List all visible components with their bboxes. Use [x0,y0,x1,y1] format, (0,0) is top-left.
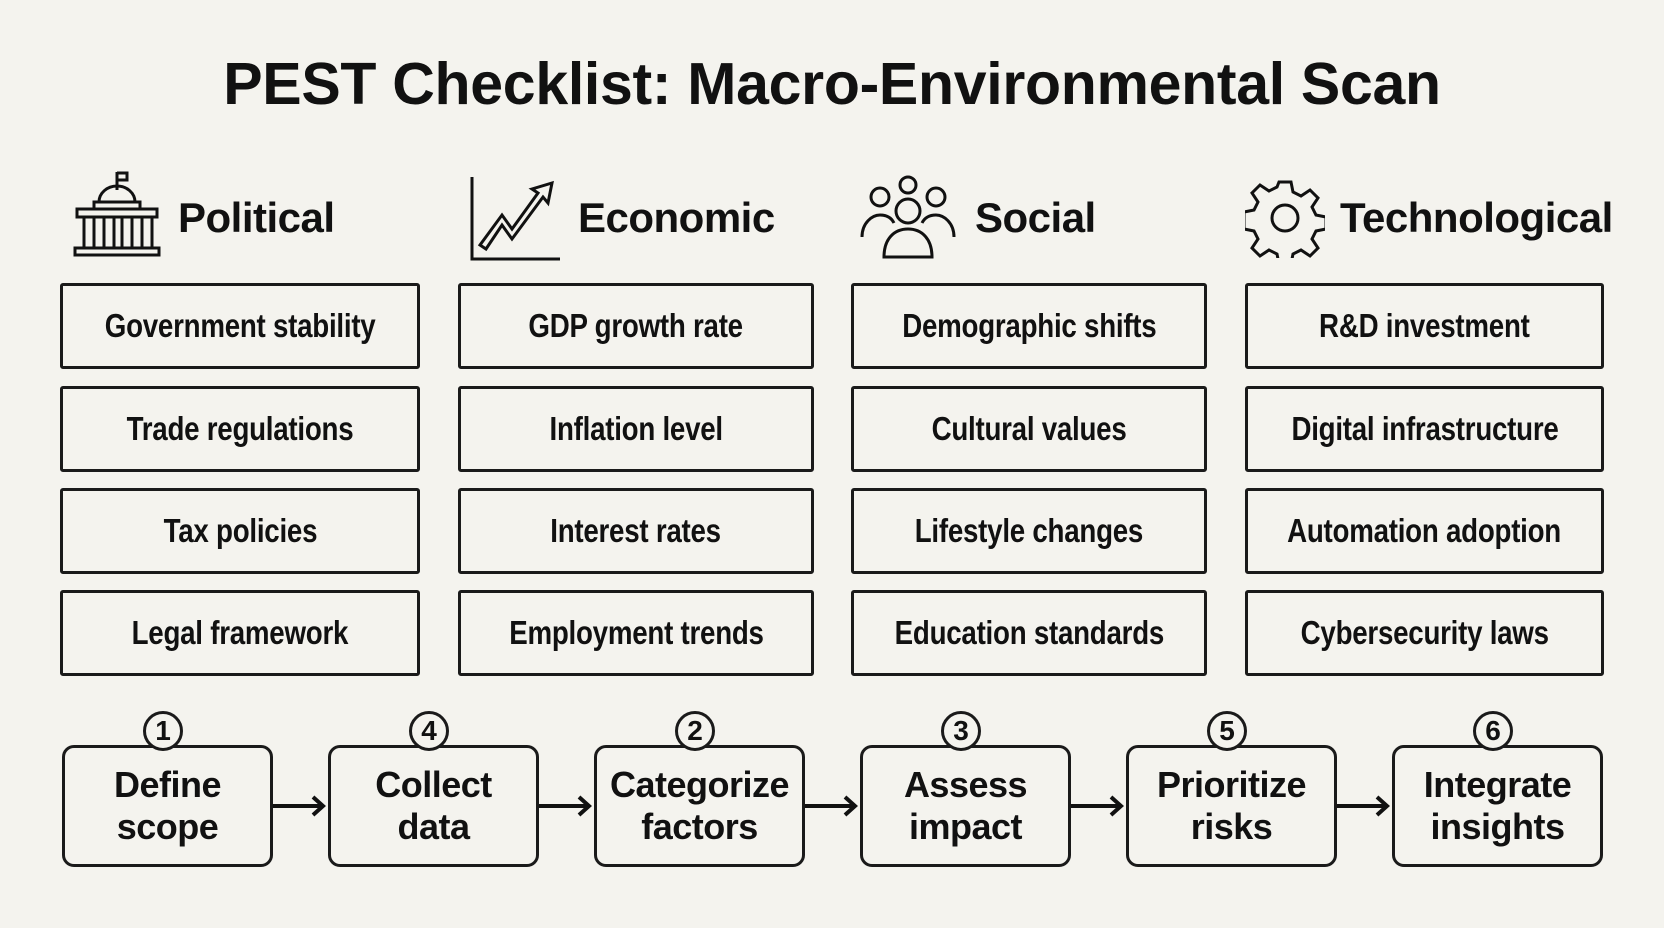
item [458,283,814,369]
title: PEST Checklist: Macro-Environmental Scan [223,51,1441,117]
column: political items [60,283,420,676]
step 5 box [1126,745,1337,867]
arrow [1071,796,1124,816]
step 1 box: scope [117,806,218,847]
item [1245,590,1604,676]
step badge 6: 6 [1485,715,1501,746]
step 1 box [62,745,273,867]
column: technological items [1245,283,1604,676]
step badge 5 [1207,711,1247,751]
item: Digital infrastructure [1291,410,1558,447]
step badge 6 [1473,711,1513,751]
heading: Economic: Economic [578,194,775,241]
icon: people group [860,176,956,258]
item: GDP growth rate [529,307,743,344]
column: economic items [458,283,814,676]
item: Cultural values [932,410,1126,447]
step 6 box: insights [1430,806,1564,847]
step 3 box: Assess [904,764,1027,805]
item [458,488,814,574]
item: Government stability [105,307,375,344]
item: Demographic shifts [902,307,1156,344]
item: Inflation level [549,410,723,447]
step badge 4 [409,711,449,751]
step badge 4: 4 [421,715,437,746]
icon: capitol building [74,172,160,256]
step badge 1 [143,711,183,751]
step 2 box [594,745,805,867]
step 1 box: Define [114,764,221,805]
item [851,590,1207,676]
item [60,590,420,676]
item: Trade regulations [127,410,353,447]
step 4 box: data [397,806,470,847]
step badge 2 [675,711,715,751]
item: Employment trends [509,614,763,651]
arrow [1337,796,1390,816]
item [60,283,420,369]
step 2 box: Categorize [610,764,789,805]
step 5 box: Prioritize [1157,764,1306,805]
step 4 box: Collect [375,764,492,805]
step 6 box [1392,745,1603,867]
item: Legal framework [132,614,348,651]
item [1245,386,1604,472]
heading: Political: Political [178,194,335,241]
step badge 2: 2 [687,715,703,746]
item [851,488,1207,574]
item [60,488,420,574]
step 3 box: impact [909,806,1022,847]
step 3 box [860,745,1071,867]
item [1245,488,1604,574]
item: Automation adoption [1288,512,1561,549]
item: Lifestyle changes [915,512,1143,549]
item: Cybersecurity laws [1300,614,1549,651]
item: Tax policies [163,512,317,549]
step badge 1: 1 [155,715,171,746]
arrow [273,796,326,816]
step 2 box: factors [641,806,758,847]
item: Education standards [894,614,1164,651]
item: R&D investment [1319,307,1530,344]
step badge 3: 3 [953,715,969,746]
item [1245,283,1604,369]
step 6 box: Integrate [1424,764,1571,805]
step badge 3 [941,711,981,751]
step 4 box [328,745,539,867]
column: social items [851,283,1207,676]
item [458,590,814,676]
step badge 5: 5 [1219,715,1235,746]
item [851,283,1207,369]
heading: Technological: Technological [1340,194,1613,241]
heading: Social: Social [975,194,1096,241]
icon: growth chart [470,177,560,260]
step 5 box: risks [1191,806,1272,847]
arrow [539,796,592,816]
item [458,386,814,472]
item [851,386,1207,472]
item: Interest rates [551,512,721,549]
icon: gear [1245,180,1325,258]
arrow [805,796,858,816]
item [60,386,420,472]
